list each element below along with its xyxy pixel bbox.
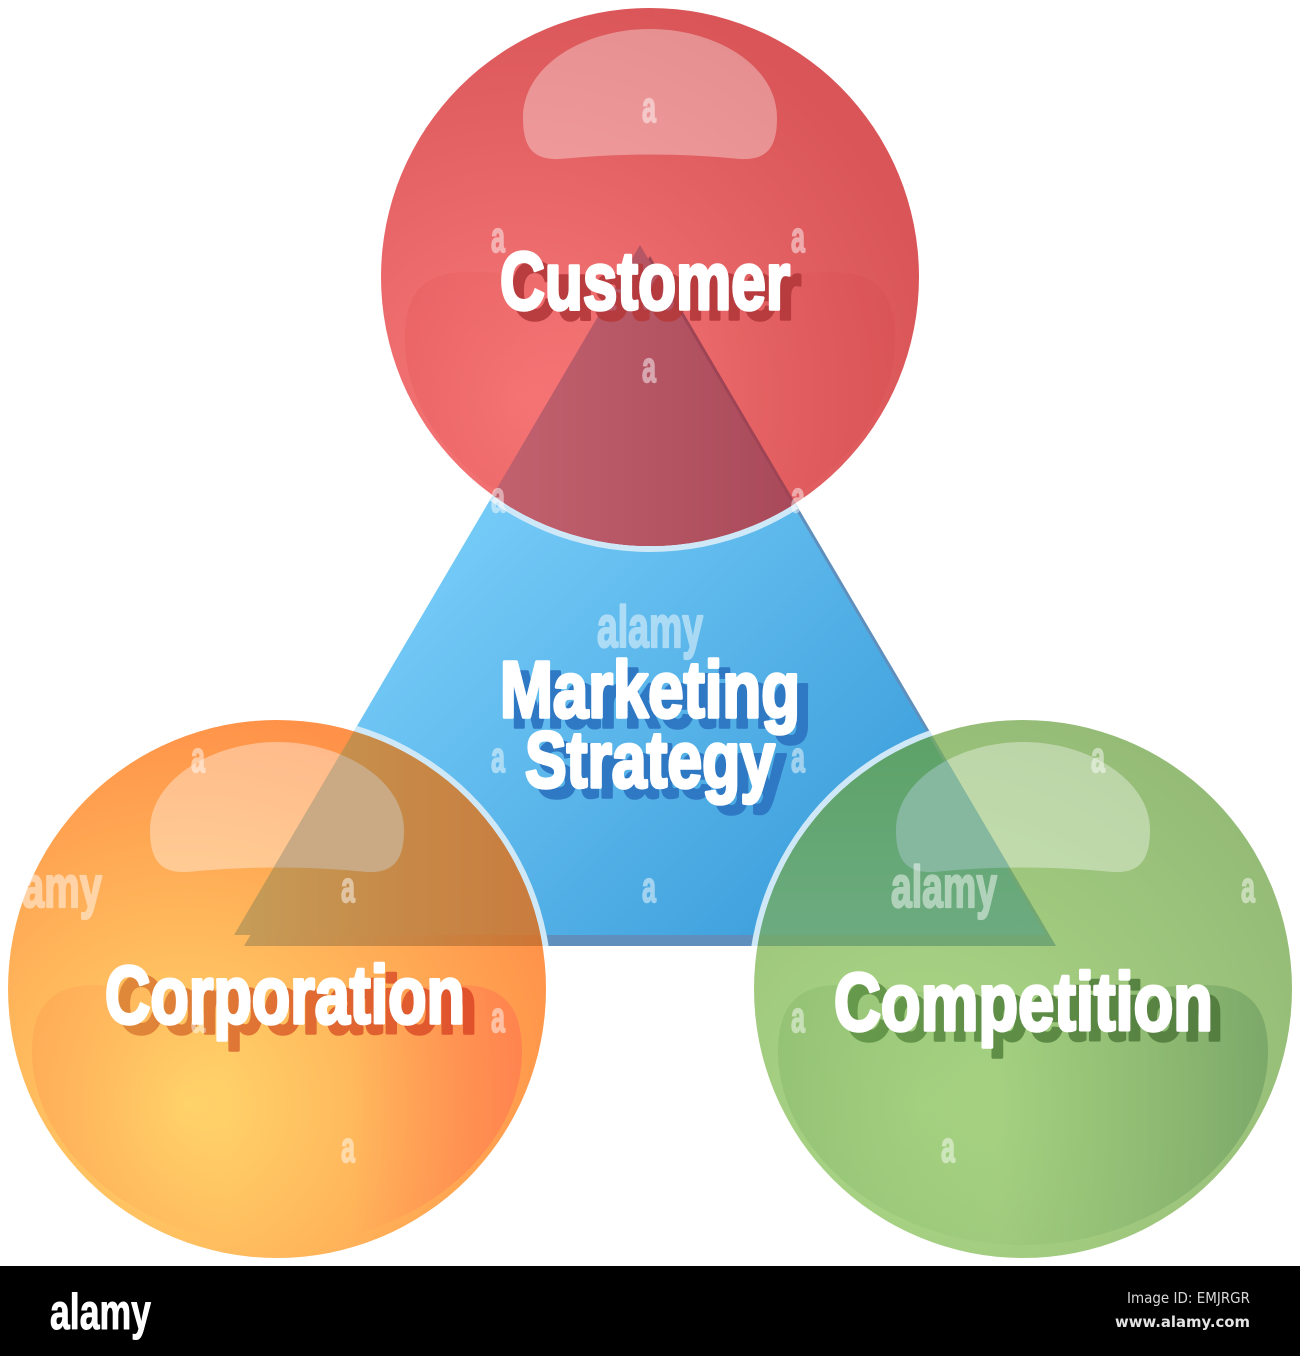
watermarks: a bbox=[941, 1123, 955, 1172]
watermarks: a bbox=[791, 733, 805, 782]
watermarks: a bbox=[791, 993, 805, 1042]
label: Marketing Strategy bbox=[500, 645, 811, 814]
watermarks: a bbox=[341, 863, 355, 912]
watermarks: a bbox=[1241, 863, 1255, 912]
watermarks: a bbox=[491, 733, 505, 782]
watermarks: alamy bbox=[891, 855, 997, 920]
label: Marketing Strategy: Marketing bbox=[500, 645, 800, 734]
label: Marketing Strategy: Strategy bbox=[536, 725, 786, 814]
footer bar bbox=[0, 1266, 1300, 1356]
circle: Customer bbox=[381, 8, 919, 546]
footer: website: www.alamy.com bbox=[1115, 1313, 1250, 1331]
watermarks: amy bbox=[22, 855, 102, 920]
circle: Competition bbox=[754, 720, 1292, 1258]
watermarks: a bbox=[642, 83, 656, 132]
panel: central blue triangle bbox=[354, 495, 932, 946]
label: Competition: Competition bbox=[834, 957, 1213, 1048]
label: Customer: Customer bbox=[511, 246, 801, 337]
footer: image id: Image ID: EMJRGR bbox=[1127, 1289, 1250, 1307]
watermarks: a bbox=[642, 343, 656, 392]
watermarks: a bbox=[791, 473, 805, 522]
circle: Corporation bbox=[8, 720, 546, 1258]
watermarks: a bbox=[1091, 733, 1105, 782]
label: Corporation: Corporation bbox=[105, 950, 465, 1041]
label: Corporation: Corporation bbox=[117, 960, 477, 1051]
watermarks: a bbox=[491, 473, 505, 522]
label: Marketing Strategy: Strategy bbox=[525, 715, 775, 804]
watermarks: a bbox=[791, 213, 805, 262]
label: Marketing Strategy: Marketing bbox=[511, 655, 811, 744]
watermarks: a bbox=[491, 993, 505, 1042]
label: Customer: Customer bbox=[500, 236, 790, 327]
watermarks: a bbox=[191, 733, 205, 782]
watermarks: a bbox=[642, 863, 656, 912]
watermarks: a bbox=[341, 1123, 355, 1172]
footer logo: alamy: alamy bbox=[50, 1284, 151, 1340]
watermarks bbox=[22, 83, 1255, 1172]
watermarks: a bbox=[491, 213, 505, 262]
watermarks: alamy bbox=[597, 595, 703, 660]
watermarks: a bbox=[191, 993, 205, 1042]
